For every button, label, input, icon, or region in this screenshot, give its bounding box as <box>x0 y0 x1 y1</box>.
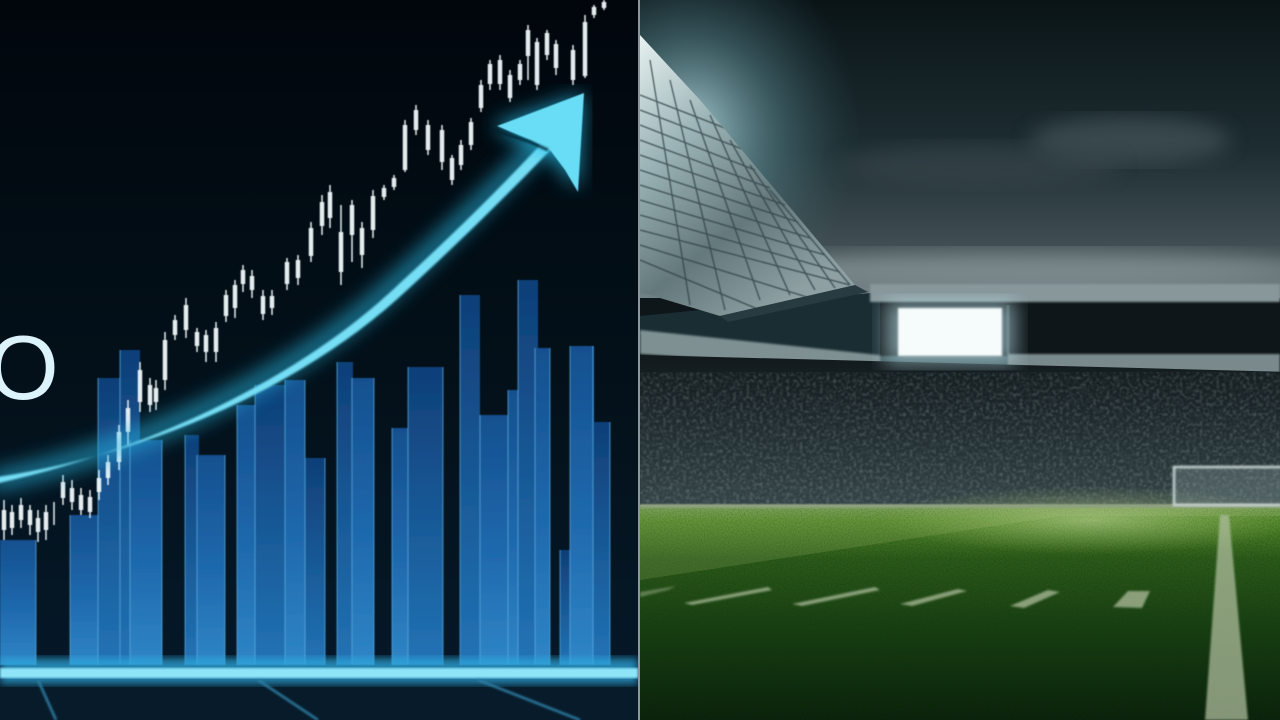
stadium roof <box>640 35 868 322</box>
chart baseline glow <box>0 658 638 720</box>
night sky <box>640 0 1280 298</box>
panel divider <box>638 0 640 720</box>
goal <box>1174 467 1280 505</box>
pitch <box>640 486 1280 720</box>
upper stand <box>640 284 1280 358</box>
growth arrow <box>0 93 584 485</box>
crowd <box>640 355 1280 507</box>
panel: growth chart <box>0 0 638 720</box>
bar chart <box>0 280 610 665</box>
advertising band <box>640 330 1280 373</box>
pitch markings <box>640 515 1248 720</box>
scoreboard <box>885 300 1015 364</box>
candlestick line <box>4 0 604 542</box>
panel: stadium <box>640 0 1280 720</box>
